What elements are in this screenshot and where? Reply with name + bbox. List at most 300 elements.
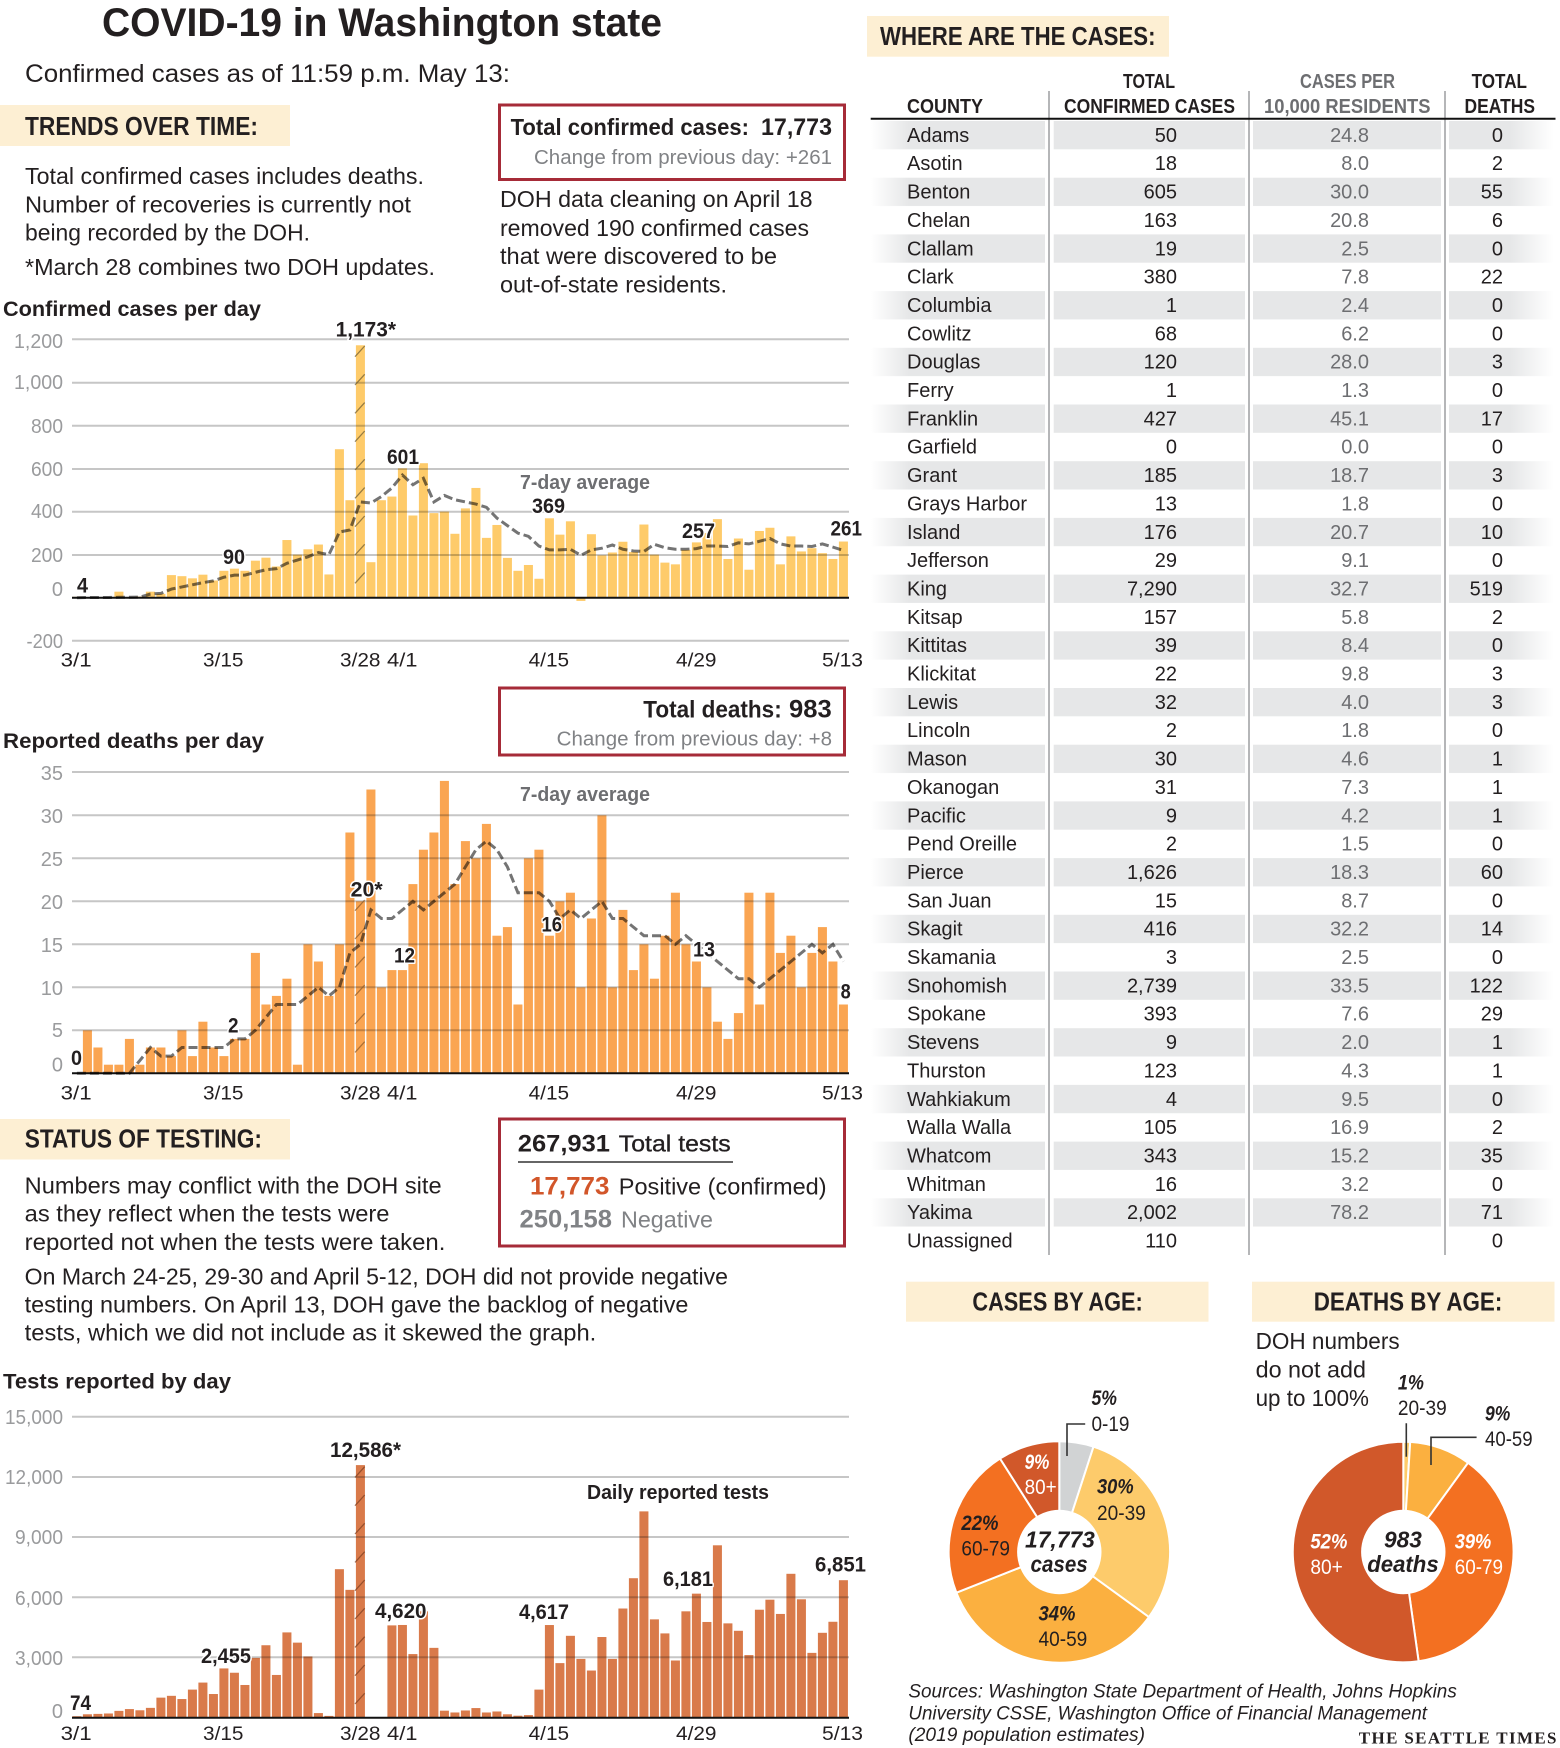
callout: total confirmed cases: Change from previous day: +261 — [534, 147, 832, 169]
table rows: 2 — [1492, 1117, 1503, 1139]
table rows: Asotin — [907, 153, 963, 175]
table rows: 7.8 — [1341, 267, 1369, 289]
table rows: 4.3 — [1341, 1060, 1369, 1082]
callout: testing totals: Total tests — [619, 1131, 731, 1157]
table rows: 122 — [1470, 975, 1503, 997]
table rows: Columbia — [907, 295, 992, 317]
donut centre label: 17,773 cases: cases — [1030, 1551, 1088, 1577]
table rows: 4.2 — [1341, 805, 1369, 827]
table rows: 9 — [1166, 805, 1177, 827]
table rows: 2 — [1492, 153, 1503, 175]
table rows: Wahkiakum — [907, 1089, 1011, 1111]
x-axis labels — [61, 650, 863, 672]
chart heading: Tests reported by day — [3, 1370, 231, 1394]
line: 7-day average of deaths — [77, 841, 843, 1073]
text block: testing notes: as they reflect when the tests were — [25, 1201, 389, 1227]
x-axis labels: 4/1 — [387, 1723, 418, 1745]
x-axis labels: 3/28 — [340, 650, 380, 672]
subtitle: Confirmed cases as of 11:59 p.m. May 13: — [25, 60, 510, 88]
y-axis labels: 3,000 — [15, 1648, 63, 1670]
callout: total confirmed cases — [500, 105, 844, 180]
table rows: 8.0 — [1341, 153, 1369, 175]
text block: testing notes: reported not when the tests were taken. — [25, 1229, 445, 1255]
data labels: 12 — [394, 945, 415, 968]
x-axis labels: 4/1 — [387, 650, 418, 672]
slice labels — [1310, 1371, 1533, 1579]
table rows: 157 — [1144, 607, 1177, 629]
data labels: 6,181 — [663, 1568, 713, 1591]
table rows: San Juan — [907, 890, 992, 912]
slice labels: 80+ — [1025, 1476, 1057, 1499]
table rows: 605 — [1144, 182, 1177, 204]
text block: trends notes: Total confirmed cases includes deaths. — [25, 163, 424, 189]
table rows: Benton — [907, 182, 970, 204]
text block: trends notes: *March 28 combines two DOH updates. — [25, 254, 435, 280]
table rows: Clark — [907, 267, 955, 289]
text block: data cleaning note — [500, 186, 813, 298]
table rows: Whitman — [907, 1174, 986, 1196]
callout: testing totals: 17,773 — [530, 1172, 609, 1200]
text block: testing notes — [25, 1172, 728, 1346]
data labels: 13 — [693, 939, 715, 962]
x-axis labels: 4/15 — [529, 650, 569, 672]
table rows: 1 — [1166, 295, 1177, 317]
slice labels: 20-39 — [1097, 1502, 1146, 1525]
table rows: 2.5 — [1341, 947, 1369, 969]
x-axis labels: 5/13 — [822, 1082, 863, 1104]
table rows: Whatcom — [907, 1145, 991, 1167]
text block: testing notes: tests, which we did not include as it skewed the graph. — [25, 1320, 596, 1346]
table rows: 60 — [1481, 862, 1503, 884]
title: COVID-19 in Washington state — [102, 1, 662, 45]
table rows: 3.2 — [1341, 1174, 1369, 1196]
sources: Sources: Washington State Department of Health, Johns Hopkins — [908, 1681, 1457, 1702]
table rows: Skamania — [907, 947, 997, 969]
table header: TOTAL — [1123, 71, 1175, 93]
table rows: 0 — [1492, 834, 1503, 856]
table rows: 24.8 — [1330, 125, 1369, 147]
y-axis labels: -200 — [26, 631, 63, 653]
data labels: 90 — [223, 546, 245, 569]
x-axis labels — [61, 1082, 863, 1104]
heading: deaths by age: DEATHS BY AGE: — [1314, 1289, 1502, 1317]
table rows: Adams — [907, 125, 969, 147]
text block: data cleaning note: out-of-state residents. — [500, 272, 727, 298]
callout: testing totals: 267,931 — [518, 1131, 610, 1158]
chart: reported deaths per day — [3, 688, 863, 1104]
y-axis labels: 6,000 — [15, 1588, 63, 1610]
table rows: Klickitat — [907, 664, 976, 686]
table rows: 4.6 — [1341, 749, 1369, 771]
x-axis labels: 4/29 — [676, 1723, 716, 1745]
table rows: 1.8 — [1341, 720, 1369, 742]
table rows: 7.3 — [1341, 777, 1369, 799]
data labels: 8 — [841, 981, 851, 1004]
data labels: 74 — [70, 1692, 91, 1715]
table rows: 9.1 — [1341, 550, 1369, 572]
y-axis labels: 5 — [52, 1020, 63, 1042]
line: 7-day average of cases — [77, 475, 843, 598]
table rows: Jefferson — [907, 550, 989, 572]
table rows: 3 — [1492, 352, 1503, 374]
chart heading: Reported deaths per day — [3, 729, 264, 753]
table rows: 0 — [1492, 720, 1503, 742]
text block: data cleaning note: that were discovered to be — [500, 243, 777, 269]
table rows: 427 — [1144, 408, 1177, 430]
data labels: 4 — [77, 575, 88, 598]
callout: testing totals: 250,158 — [520, 1206, 612, 1234]
y-axis labels: 600 — [31, 459, 63, 481]
x-axis labels: 4/29 — [676, 650, 716, 672]
table rows: 3 — [1166, 947, 1177, 969]
table rows: 0 — [1492, 1174, 1503, 1196]
table rows: 0 — [1492, 380, 1503, 402]
table striping — [871, 91, 1556, 1255]
y-axis labels: 10 — [41, 978, 63, 1000]
table rows: 15.2 — [1330, 1145, 1369, 1167]
table rows: 16.9 — [1330, 1117, 1369, 1139]
data labels — [77, 319, 862, 598]
table rows: Garfield — [907, 437, 977, 459]
panel: deaths by age — [1252, 1282, 1554, 1662]
data labels: 20* — [351, 879, 384, 902]
table rows: 2,002 — [1127, 1202, 1177, 1224]
text block: DOH numbers note: DOH numbers — [1256, 1328, 1400, 1354]
heading: trends over time: TRENDS OVER TIME: — [25, 113, 258, 141]
table rows: 8.7 — [1341, 890, 1369, 912]
data labels: 1,173* — [336, 319, 397, 342]
table rows: 393 — [1144, 1004, 1177, 1026]
table rows: 0 — [1492, 1089, 1503, 1111]
table rows: 3 — [1492, 692, 1503, 714]
y-axis labels: 800 — [31, 416, 63, 438]
text block: DOH numbers note: up to 100% — [1256, 1385, 1369, 1411]
table rows: 0 — [1492, 947, 1503, 969]
table rows: 32.2 — [1330, 919, 1369, 941]
panel: cases by age — [906, 1282, 1208, 1663]
y-axis labels: 12,000 — [5, 1467, 63, 1489]
table rows: Cowlitz — [907, 323, 971, 345]
table rows: 20.8 — [1330, 210, 1369, 232]
heading: status of testing: STATUS OF TESTING: — [25, 1125, 262, 1153]
text block: DOH numbers note: do not add — [1256, 1356, 1366, 1382]
table rows: 6.2 — [1341, 323, 1369, 345]
table header: COUNTY — [907, 96, 984, 118]
table rows: Okanogan — [907, 777, 999, 799]
slice labels: 20-39 — [1398, 1397, 1447, 1420]
slice labels — [961, 1387, 1146, 1651]
callout: total deaths: 983 — [789, 696, 832, 724]
chart heading: Confirmed cases per day — [3, 297, 261, 321]
table rows: 2 — [1166, 834, 1177, 856]
slice labels: 60-79 — [1455, 1556, 1503, 1579]
heading: where are the cases: WHERE ARE THE CASES: — [880, 23, 1156, 51]
data labels: 16 — [542, 914, 562, 937]
slice labels: 52% — [1310, 1530, 1348, 1553]
slice labels: 40-59 — [1038, 1628, 1087, 1651]
table rows: Lincoln — [907, 720, 970, 742]
table rows: 17 — [1481, 408, 1503, 430]
label: 7-day average: 7-day average — [520, 784, 650, 806]
table rows: 50 — [1155, 125, 1177, 147]
x-axis labels: 3/1 — [61, 650, 92, 672]
logo: The Seattle Times: THE SEATTLE TIMES — [1359, 1728, 1556, 1747]
table rows: 185 — [1144, 465, 1177, 487]
x-axis labels: 3/15 — [203, 1082, 244, 1104]
text block: testing notes: Numbers may conflict with the DOH site — [25, 1172, 442, 1198]
bars: daily deaths — [83, 781, 848, 1073]
table rows: 1.3 — [1341, 380, 1369, 402]
slice labels: 1% — [1398, 1371, 1424, 1394]
data labels: 2,455 — [201, 1645, 251, 1668]
slice labels: 39% — [1455, 1530, 1492, 1553]
table rows: Unassigned — [907, 1231, 1013, 1253]
table rows: 18.7 — [1330, 465, 1369, 487]
y-axis labels: 15,000 — [5, 1407, 63, 1429]
table rows: Pierce — [907, 862, 964, 884]
heading: cases by age — [906, 1282, 1208, 1322]
table header: CONFIRMED CASES — [1064, 96, 1235, 118]
text block: DOH numbers note — [1256, 1328, 1400, 1411]
label: daily reported tests: Daily reported tests — [587, 1482, 769, 1504]
table rows: 29 — [1155, 550, 1177, 572]
table rows: 31 — [1155, 777, 1177, 799]
table rows: 1.5 — [1341, 834, 1369, 856]
x-axis labels — [61, 1723, 863, 1745]
data labels: 2 — [228, 1015, 238, 1038]
table rows: 6 — [1492, 210, 1503, 232]
y-axis labels: 30 — [41, 806, 63, 828]
x-axis labels: 3/28 — [340, 1723, 380, 1745]
sources: University CSSE, Washington Office of Financial Management — [908, 1703, 1428, 1724]
donut centre label: 983 deaths: deaths — [1367, 1551, 1439, 1577]
y-axis labels — [5, 1407, 63, 1723]
data labels: 601 — [387, 446, 419, 469]
table rows: 0 — [1492, 437, 1503, 459]
y-axis labels: 0 — [52, 1701, 63, 1723]
table rows: 0 — [1492, 125, 1503, 147]
table rows: 28.0 — [1330, 352, 1369, 374]
data labels: 4,620 — [375, 1600, 426, 1623]
text block: testing notes: On March 24-25, 29-30 and April 5-12, DOH did not provide negative — [25, 1263, 728, 1289]
text block: data cleaning note: DOH data cleaning on April 18 — [500, 186, 813, 212]
x-axis labels: 5/13 — [822, 1723, 863, 1745]
table rows: 68 — [1155, 323, 1177, 345]
table rows: 39 — [1155, 635, 1177, 657]
y-axis labels: 9,000 — [15, 1527, 63, 1549]
table rows: 519 — [1470, 578, 1503, 600]
table rows: Douglas — [907, 352, 980, 374]
table rows: 9.8 — [1341, 664, 1369, 686]
slice labels: 80+ — [1310, 1556, 1343, 1579]
y-axis labels: 15 — [41, 935, 63, 957]
slice labels: 30% — [1097, 1475, 1134, 1498]
data labels: 12,586* — [330, 1439, 402, 1462]
table rows: 416 — [1144, 919, 1177, 941]
table header: 10,000 RESIDENTS — [1264, 96, 1430, 118]
heading: where are the cases — [867, 16, 1169, 57]
callout: total confirmed cases: 17,773 — [761, 114, 832, 141]
y-axis labels: 400 — [31, 501, 63, 523]
table header: CASES PER — [1300, 71, 1395, 93]
slice labels: 60-79 — [961, 1538, 1010, 1561]
y-axis labels: 1,200 — [14, 331, 63, 353]
panel: trends over time — [0, 105, 844, 298]
table rows: 4.0 — [1341, 692, 1369, 714]
y-axis labels: 35 — [41, 763, 63, 785]
heading: status of testing — [0, 1119, 290, 1160]
table rows: 2 — [1492, 607, 1503, 629]
slice labels: 0-19 — [1092, 1413, 1129, 1436]
table rows: Mason — [907, 749, 967, 771]
x-axis labels: 3/28 — [340, 1082, 380, 1104]
table rows: 380 — [1144, 267, 1177, 289]
table rows: Kittitas — [907, 635, 967, 657]
table rows: Spokane — [907, 1004, 986, 1026]
table rows: 18.3 — [1330, 862, 1369, 884]
table rows: Grant — [907, 465, 957, 487]
slice labels: 9% — [1485, 1403, 1511, 1426]
table rows: 0.0 — [1341, 437, 1369, 459]
table rows: 0 — [1492, 238, 1503, 260]
table rows: 71 — [1481, 1202, 1503, 1224]
table rows: 5.8 — [1341, 607, 1369, 629]
y-axis labels — [41, 763, 63, 1077]
table rows: 0 — [1492, 635, 1503, 657]
heading: deaths by age — [1252, 1282, 1554, 1322]
sources — [908, 1681, 1457, 1746]
bars: daily tests — [72, 1465, 848, 1718]
panel: status of testing — [0, 1119, 844, 1346]
x-axis labels: 4/15 — [529, 1082, 569, 1104]
y-axis labels: 20 — [41, 892, 63, 914]
data labels — [70, 1439, 866, 1715]
table rows: 35 — [1481, 1145, 1503, 1167]
data labels: 6,851 — [815, 1554, 866, 1577]
x-axis labels: 4/15 — [529, 1723, 569, 1745]
callout: total confirmed cases: Total confirmed cases: — [511, 114, 749, 140]
table rows: 0 — [1492, 890, 1503, 912]
table rows: Kitsap — [907, 607, 963, 629]
bars: daily cases — [72, 345, 848, 601]
slice labels: 40-59 — [1485, 1428, 1533, 1451]
y-axis labels: 1,000 — [14, 372, 63, 394]
table rows: 120 — [1144, 352, 1177, 374]
slice labels: 5% — [1092, 1387, 1117, 1410]
table rows: Yakima — [907, 1202, 973, 1224]
text block: trends notes: Number of recoveries is currently not — [25, 192, 412, 218]
table rows: Clallam — [907, 238, 974, 260]
table rows: 3 — [1492, 664, 1503, 686]
table rows: 0 — [1492, 323, 1503, 345]
table rows: 18 — [1155, 153, 1177, 175]
data labels: 261 — [830, 518, 862, 541]
x-axis labels: 3/1 — [61, 1723, 92, 1745]
table rows: 0 — [1492, 1231, 1503, 1253]
table rows: 0 — [1492, 550, 1503, 572]
table rows: 78.2 — [1330, 1202, 1369, 1224]
text block: trends notes: being recorded by the DOH. — [25, 220, 310, 246]
slice labels: 9% — [1025, 1451, 1050, 1474]
table rows: 7,290 — [1127, 578, 1177, 600]
leader lines — [1406, 1423, 1477, 1465]
donut chart: cases by age — [949, 1441, 1170, 1663]
table rows: 0 — [1492, 493, 1503, 515]
table rows: 10 — [1481, 522, 1503, 544]
table rows: 7.6 — [1341, 1004, 1369, 1026]
table rows: 13 — [1155, 493, 1177, 515]
table rows: Lewis — [907, 692, 958, 714]
table rows: 176 — [1144, 522, 1177, 544]
table rows: 105 — [1144, 1117, 1177, 1139]
callout: total deaths: Total deaths: — [643, 697, 782, 724]
callout: total deaths — [500, 688, 844, 755]
table rows: 2.0 — [1341, 1032, 1369, 1054]
heading: cases by age: CASES BY AGE: — [972, 1289, 1143, 1317]
table rows: 55 — [1481, 182, 1503, 204]
table rows: 4 — [1166, 1089, 1177, 1111]
table rows: Franklin — [907, 408, 978, 430]
table rows: 1.8 — [1341, 493, 1369, 515]
callout: total deaths: Change from previous day: +8 — [557, 729, 832, 751]
y-axis labels: 0 — [52, 1055, 63, 1077]
table rows: 19 — [1155, 238, 1177, 260]
y-axis labels: 25 — [41, 849, 63, 871]
callout: testing totals — [500, 1119, 844, 1246]
table header: TOTAL — [1472, 71, 1527, 93]
y-axis labels: 200 — [31, 545, 63, 567]
y-axis labels: 0 — [52, 579, 63, 601]
table rows: 32.7 — [1330, 578, 1369, 600]
table header: DEATHS — [1464, 96, 1535, 118]
slice labels: 34% — [1038, 1603, 1076, 1626]
table rows: 0 — [1492, 295, 1503, 317]
table rows: 29 — [1481, 1004, 1503, 1026]
table rows: 16 — [1155, 1174, 1177, 1196]
panel: where are the cases — [867, 16, 1556, 1255]
x-axis labels: 3/15 — [203, 650, 244, 672]
heading: trends over time — [0, 105, 290, 146]
table rows: Grays Harbor — [907, 493, 1027, 515]
table rows: 9 — [1166, 1032, 1177, 1054]
table rows: 0 — [1166, 437, 1177, 459]
text block: trends notes — [25, 163, 435, 280]
table rows: 22 — [1155, 664, 1177, 686]
data labels: 4,617 — [519, 1601, 569, 1624]
donut centre label: 983 deaths: 983 — [1384, 1526, 1422, 1552]
data labels: 369 — [532, 495, 565, 518]
table rows: Ferry — [907, 380, 954, 402]
table rows: Snohomish — [907, 975, 1007, 997]
callout: testing totals: Positive (confirmed) — [619, 1173, 827, 1199]
table rows: 45.1 — [1330, 408, 1369, 430]
label: 7-day average: 7-day average — [520, 472, 650, 494]
table rows: Skagit — [907, 919, 963, 941]
table rows: 2.4 — [1341, 295, 1369, 317]
donut chart: deaths by age — [1293, 1442, 1513, 1662]
leader line: 0-19 — [1067, 1424, 1085, 1456]
donut centre label: 17,773 cases: 17,773 — [1025, 1526, 1095, 1552]
chart: confirmed cases per day — [3, 297, 863, 672]
table rows: Thurston — [907, 1060, 986, 1082]
table rows: 1 — [1492, 805, 1503, 827]
x-axis labels: 4/1 — [387, 1082, 418, 1104]
table rows: 22 — [1481, 267, 1503, 289]
chart: tests reported by day — [3, 1370, 866, 1745]
x-axis labels: 3/15 — [203, 1723, 244, 1745]
table rows: 20.7 — [1330, 522, 1369, 544]
table rows: 1,626 — [1127, 862, 1177, 884]
